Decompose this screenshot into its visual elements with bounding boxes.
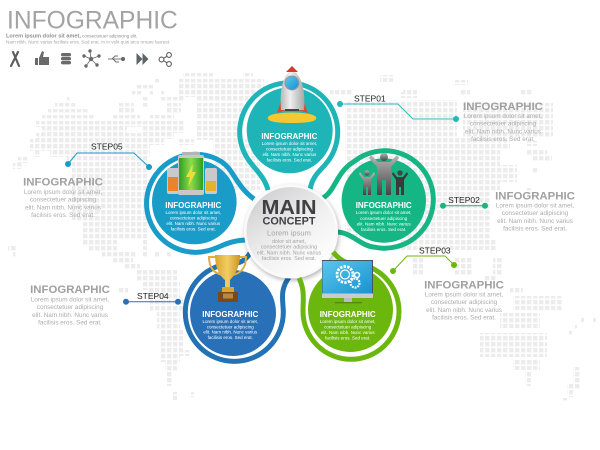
side text: step 5: Lorem ipsum dolor sit amet, [24,189,102,196]
side text: step 1 [463,101,543,143]
step 3 text: facilisis eros. Sed erat. [325,336,370,340]
step 4 text: INFOGRAPHIC [202,310,259,319]
concept subtitle: CONCEPT [262,216,316,228]
side text: step 1: Lorem ipsum dolor sit amet, [464,113,542,120]
step 5 text: INFOGRAPHIC [165,201,222,210]
step 1 text: Lorem ipsum dolor sit amet, [262,141,317,146]
step 1 callout: connector: STEP01 [354,94,386,104]
icon: rocket [268,66,316,123]
step 5 text: elit. Nam nibh. Nunc varius [166,221,221,226]
header subtitle: Lorem ipsum dolor sit amet, consectetuer adipiscing elit. [6,34,137,40]
side text: step 1: elit. Nam nibh. Nunc varius [465,128,541,135]
panel: step 2 people circle [323,151,433,248]
panel: step 3 monitor circle [299,252,399,359]
step 3 text [320,310,376,340]
side text: step 3 [424,280,504,322]
side text: step 4: INFOGRAPHIC [30,284,110,296]
step 4 callout: connector: STEP04 [137,291,169,301]
step 4 text: facilisis eros. Sed erat. [208,335,253,340]
step 2 text: Lorem ipsum dolor sit amet, [356,210,411,215]
side text: step 3: facilisis eros. Sed erat. [432,314,496,322]
title: INFOGRAPHIC [7,8,178,34]
step 3 callout: connector [390,246,457,274]
main description: dolor sit amet, [272,239,306,245]
side text: step 5: elit. Nam nibh. Nunc varius [25,204,101,211]
icon: tools [11,52,19,66]
icon: database [61,53,71,64]
side text: step 3: consectetuer adipiscing [431,299,498,306]
step 3 text: Lorem ipsum dolor sit amet, [320,319,375,324]
step 4 text: consectetuer adipiscing [207,324,254,329]
icon: fast forward [136,53,148,65]
main title: MAIN [262,197,316,219]
side text: step 2: consectetuer adipiscing [502,210,569,217]
step 5 text: Lorem ipsum dolor sit amet, [166,210,221,215]
world map dot background [0,70,600,405]
step 2 text [356,201,412,232]
icon: monitor with gears [322,260,373,303]
side text: step 2: elit. Nam nibh. Nunc varius [497,218,573,225]
side text: step 5: INFOGRAPHIC [23,177,103,189]
step 5 text: facilisis eros. Sed erat. [171,226,216,232]
side text: step 4: facilisis eros. Sed erat. [38,320,102,326]
step 2 callout: connector: STEP02 [448,195,480,205]
step 1 text: consectetuer adipiscing [266,147,313,152]
step 3 text: consectetuer adipiscing [324,324,372,330]
step 4 callout: connector [123,291,181,305]
step 4 text: elit. Nam nibh. Nunc varius [203,330,258,335]
step 1 text [261,132,318,163]
main description [257,229,322,262]
side text: step 4: elit. Nam nibh. Nunc varius [32,312,108,319]
side text: step 1: consectetuer adipiscing [470,121,537,128]
side text: step 5 [23,177,103,219]
icon: share [159,53,171,66]
header description: Nam nibh. Nunc varius facilisis eros. Sed erat. In in velit quis arcu ornare laoreet. [6,40,170,44]
side text: step 1: INFOGRAPHIC [463,101,543,113]
icon: usb [108,56,125,62]
main description: elit. Nam nibh. Nunc varius [257,250,322,256]
main description: consectetuer adipiscing [261,245,317,251]
side text: step 2: facilisis eros. Sed erat. [503,226,567,232]
icon: people cheering [359,153,408,195]
step 2 callout: connector [440,195,488,209]
side text: step 2: Lorem ipsum dolor sit amet, [496,202,574,210]
step 3 text: elit. Nam nibh. Nunc varius [321,330,375,335]
step 1 text: elit. Nam nibh. Nunc varius [263,152,317,157]
main description: facilisis eros. Sed erat. [262,256,316,262]
step 2 text: elit. Nam nibh. Nunc varius [357,222,411,226]
panel: step 4 trophy circle [185,253,290,361]
step 5 text [165,201,222,232]
side text: step 3: INFOGRAPHIC [424,280,504,292]
side text: step 4: consectetuer adipiscing [37,304,104,311]
icon: trophy [209,255,246,302]
icon: thumbs up [35,51,49,65]
step 2 text: INFOGRAPHIC [356,201,412,210]
step 1 text: facilisis eros. Sed erat. [267,158,312,163]
step 2 text: facilisis eros. Sed erat. [361,227,406,232]
header [6,8,178,67]
side text: step 5: consectetuer adipiscing [30,197,97,204]
icon row [11,50,171,67]
panel: main concept circle [244,184,338,278]
step 3 text: INFOGRAPHIC [320,310,376,319]
step 5 callout: connector [65,142,152,170]
side text: step 5: facilisis eros. Sed erat. [31,212,95,219]
icon: batteries [167,152,217,195]
side text: step 2 [495,190,575,232]
step 4 text [202,310,259,340]
step 1 callout: connector [337,94,459,122]
step 5 text: consectetuer adipiscing [170,216,217,220]
icon: network [83,50,100,67]
step 4 text: Lorem ipsum dolor sit amet, [203,319,258,324]
panel: step 1 rocket circle [240,66,338,190]
step 2 text: consectetuer adipiscing [360,216,408,221]
side text: step 3: Lorem ipsum dolor sit amet, [425,292,503,298]
side text: step 1: facilisis eros. Sed erat. [471,136,535,143]
main description: Lorem ipsum [267,229,311,238]
panel: step 5 battery circle [147,152,254,252]
side text: step 4: Lorem ipsum dolor sit amet, [31,296,109,304]
step 3 callout: connector: STEP03 [419,246,451,256]
side text: step 3: elit. Nam nibh. Nunc varius [426,307,502,314]
side text: step 4 [30,284,110,326]
step 1 text: INFOGRAPHIC [261,132,318,141]
step 5 callout: connector: STEP05 [91,142,123,152]
side text: step 2: INFOGRAPHIC [495,190,575,202]
